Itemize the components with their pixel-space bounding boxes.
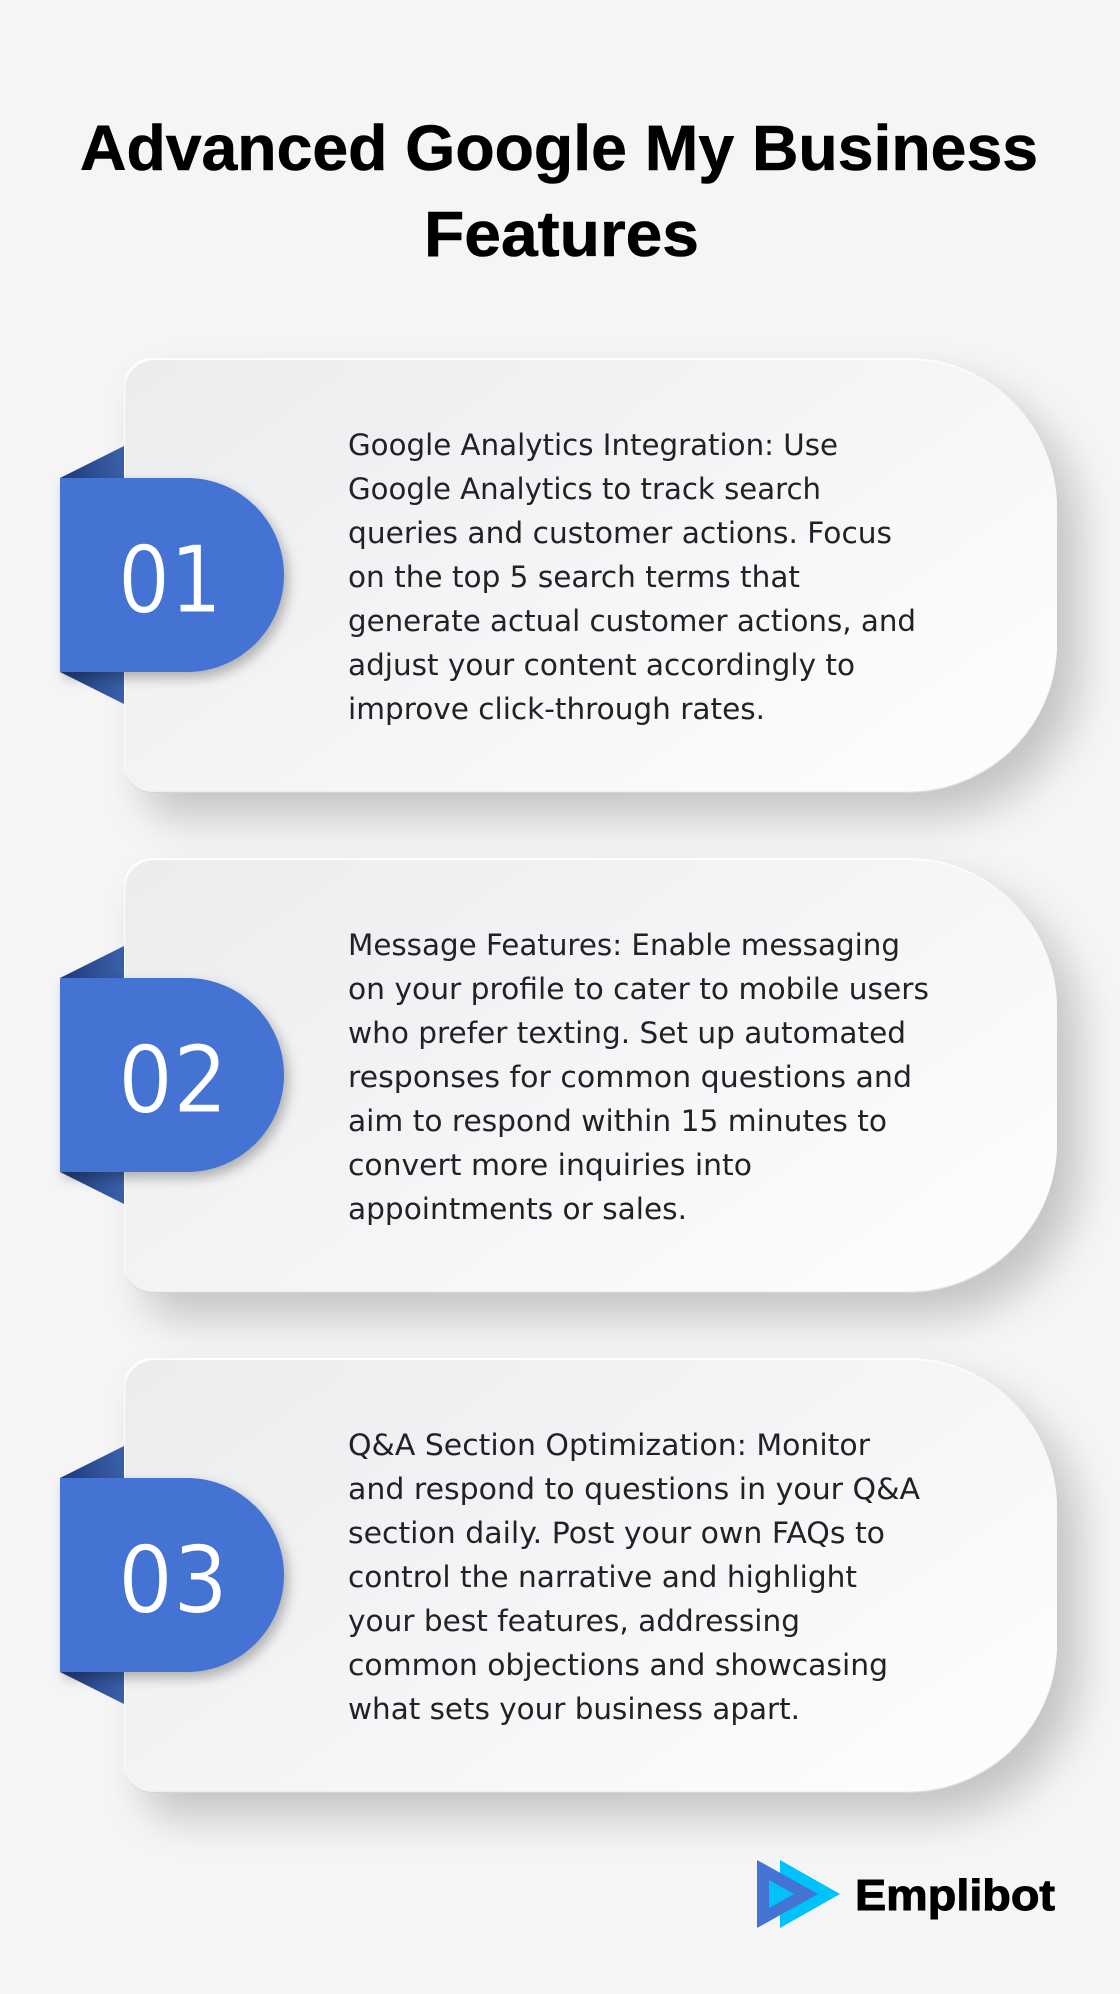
text: step 3: 03 (118, 1526, 228, 1634)
text: step 3: what sets your business apart. (348, 1692, 800, 1726)
text: step 1: on the top 5 search terms that (348, 560, 800, 594)
text: step 2: 02 (118, 1026, 228, 1134)
step 1 (57, 358, 1098, 836)
text: step 2: responses for common questions and (348, 1060, 912, 1094)
text: step 1: adjust your content accordingly to (348, 648, 855, 682)
panel: Google Analytics Integration (124, 358, 1057, 793)
text: step 3: and respond to questions in your Q&A (348, 1472, 920, 1506)
text: step 3 (118, 1428, 920, 1726)
step 3 (57, 1358, 1098, 1836)
text: step 3: Q&A Section Optimization: Monitor (348, 1428, 870, 1462)
text: step 1: Google Analytics to track search (348, 472, 821, 506)
text: step 1: improve click-through rates. (348, 692, 765, 726)
text: step 2: aim to respond within 15 minutes to (348, 1104, 887, 1138)
text: step 2: appointments or sales. (348, 1192, 687, 1226)
text: step 3: control the narrative and highlight (348, 1560, 857, 1594)
title: Advanced Google My Business (80, 112, 1038, 184)
title (80, 112, 1038, 270)
ribbon fold (60, 946, 124, 1204)
text: step 1: queries and customer actions. Focus (348, 516, 892, 550)
text: step 1: 01 (118, 526, 222, 634)
step 2 (57, 858, 1098, 1336)
text: step 3: common objections and showcasing (348, 1648, 888, 1682)
logo: Emplibot (757, 1860, 1055, 1928)
text: step 2: convert more inquiries into (348, 1148, 752, 1182)
panel: Q&A Section Optimization (124, 1358, 1057, 1793)
text: step 1: Google Analytics Integration: Use (348, 428, 838, 462)
text: step 2: who prefer texting. Set up automated (348, 1016, 906, 1050)
text: step 2: Message Features: Enable messaging (348, 928, 900, 962)
number badge 03 (60, 1478, 284, 1672)
ribbon fold (60, 1446, 124, 1704)
text: step 2 (118, 928, 929, 1226)
text: step 1 (118, 428, 916, 726)
ribbon fold (60, 446, 124, 704)
logo wordmark: Emplibot (855, 1871, 1055, 1920)
text: step 3: your best features, addressing (348, 1604, 800, 1638)
title: Features (424, 198, 699, 270)
text: step 2: on your profile to cater to mobile users (348, 972, 929, 1006)
number badge 01 (60, 478, 284, 672)
icon: play triangles (757, 1860, 840, 1928)
panel: Message Features (124, 858, 1057, 1293)
number badge 02 (60, 978, 284, 1172)
text: step 3: section daily. Post your own FAQs to (348, 1516, 885, 1550)
text: step 1: generate actual customer actions, and (348, 604, 916, 638)
